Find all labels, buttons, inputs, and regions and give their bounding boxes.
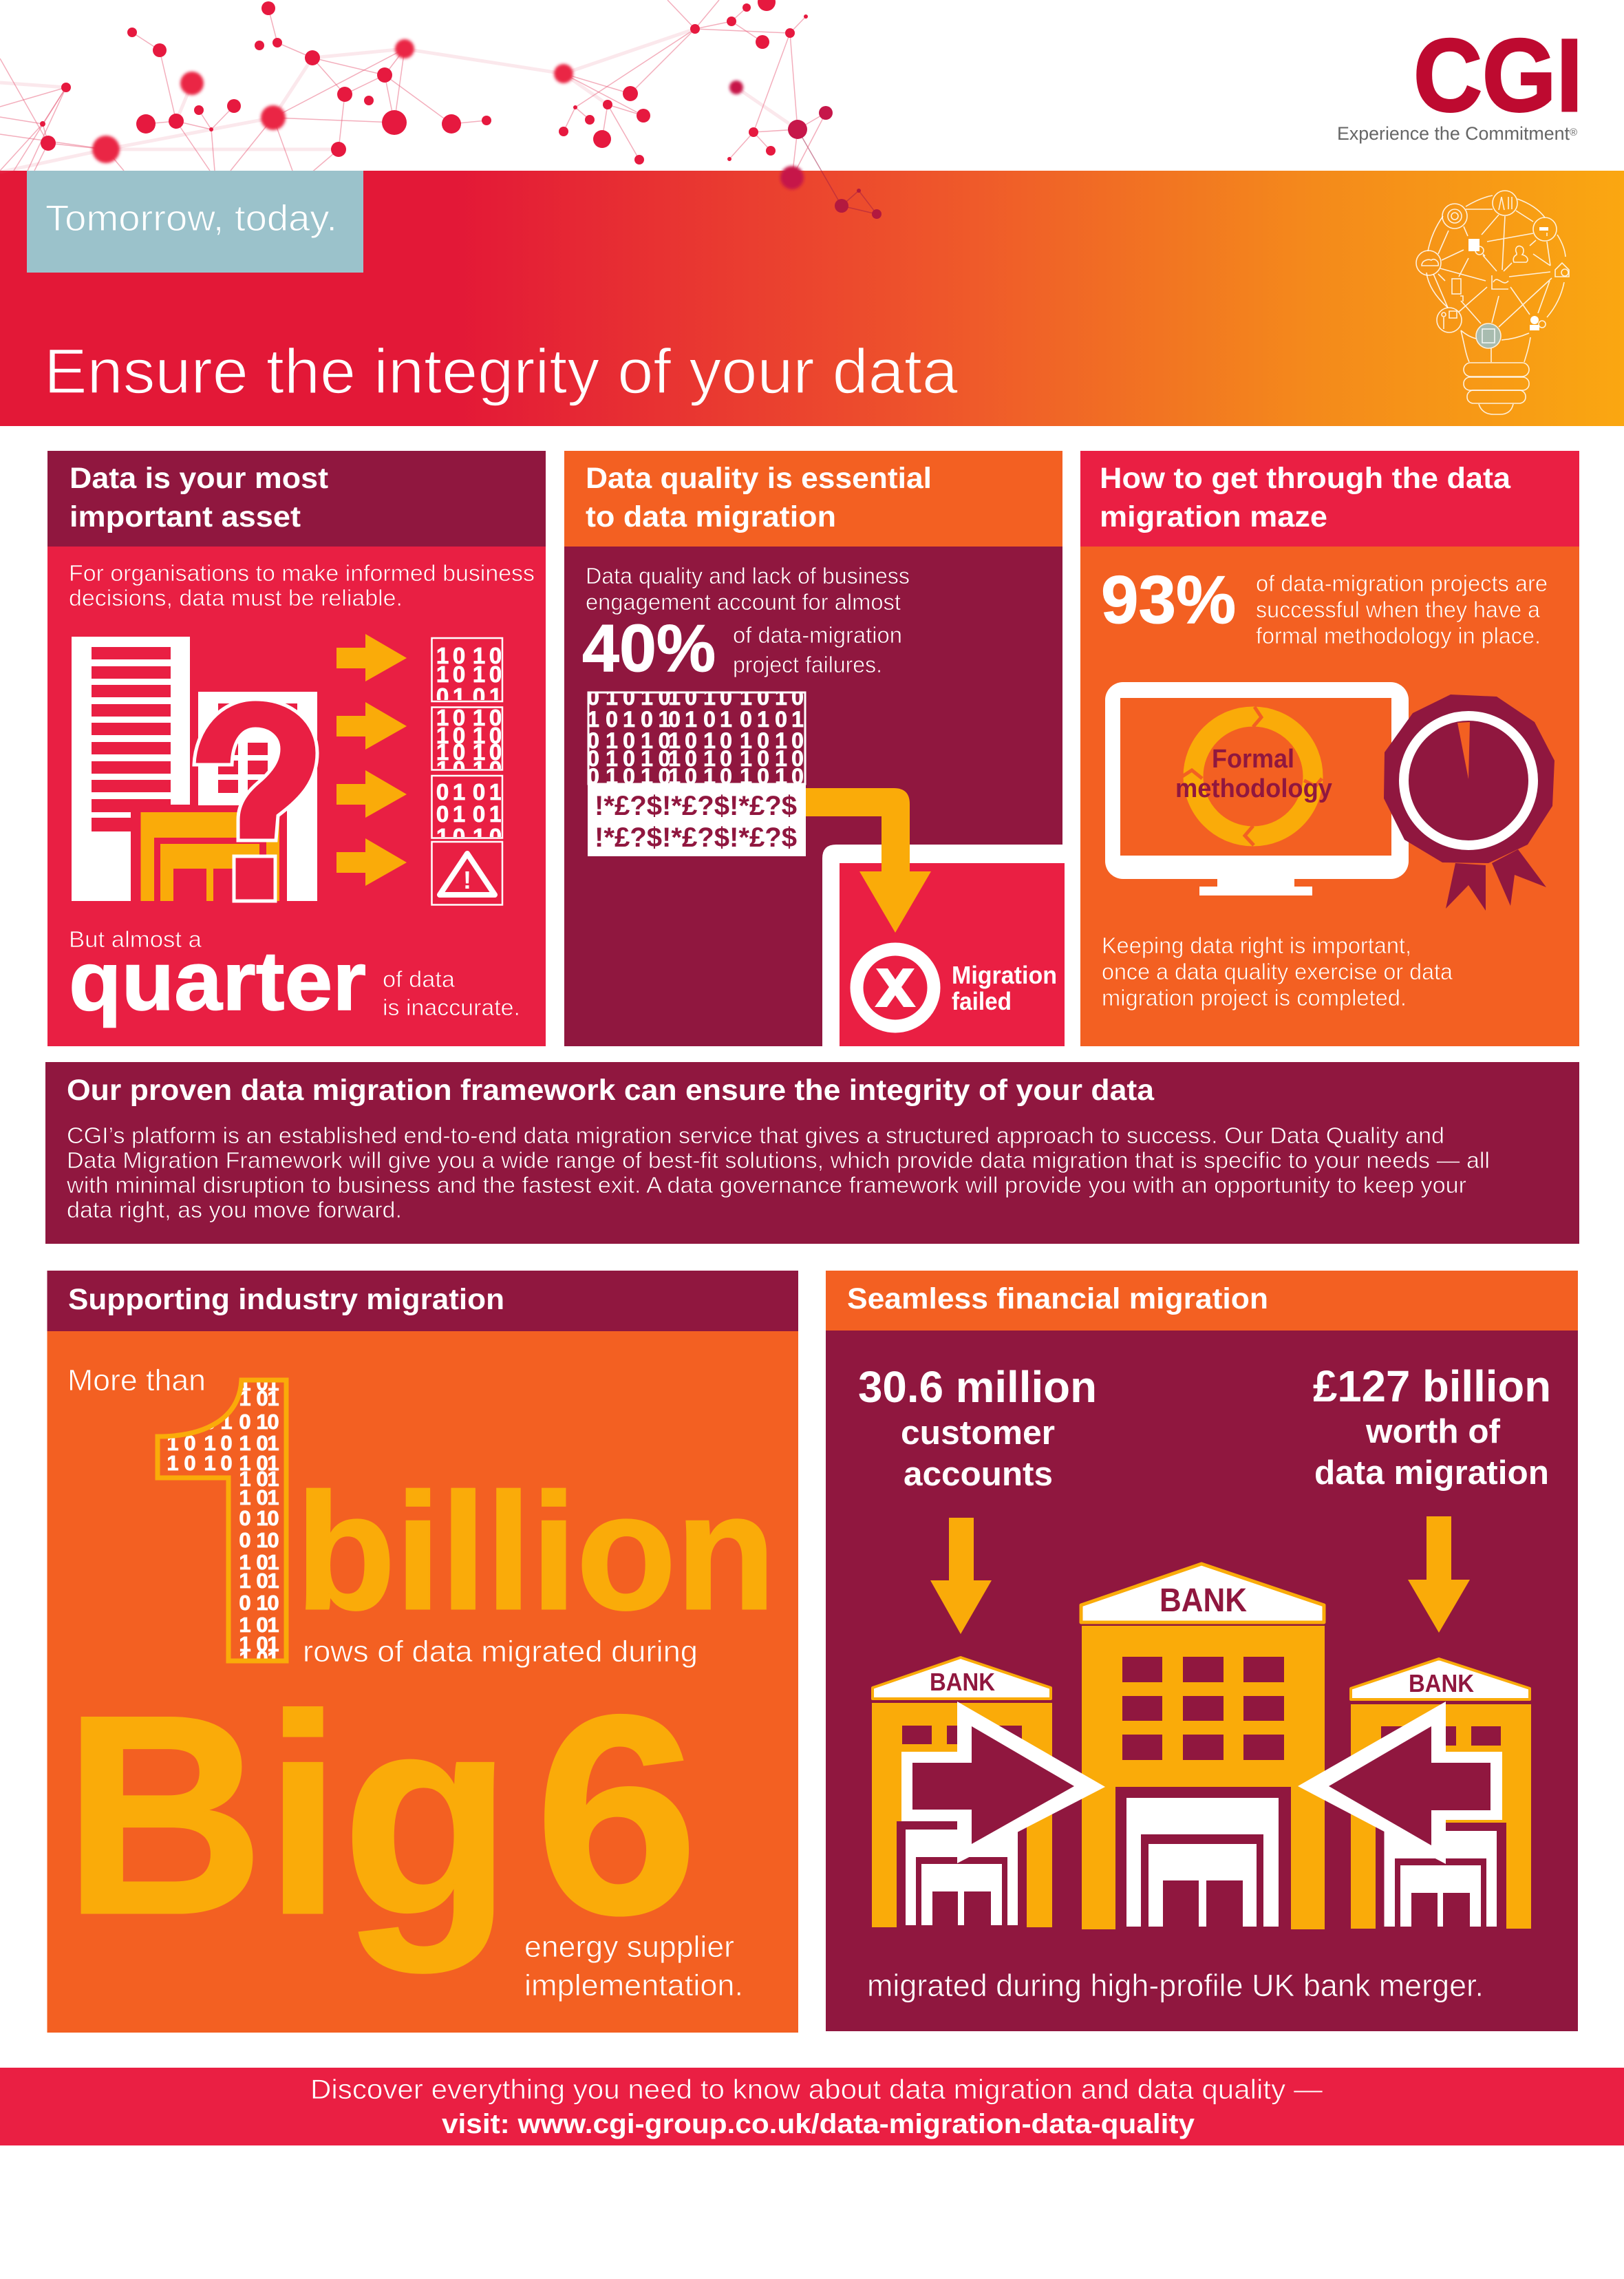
closing text <box>1102 933 1453 1010</box>
icon: data stacks and warning: ! <box>463 866 471 894</box>
stat: 40% <box>582 611 902 686</box>
arrows <box>336 634 407 886</box>
intro text <box>69 560 535 611</box>
panel heading: How to get through the data <box>1100 462 1511 495</box>
stat: 30.6 million customer accounts: 30.6 million <box>858 1362 1097 1412</box>
header banner <box>0 171 1624 426</box>
panel: proven framework: Our proven data migration framework can ensure the integrity of your data <box>67 1074 1155 1107</box>
numeral one of binary digits: 101 <box>239 1646 279 1671</box>
stat: quarter of data inaccurate: quarter <box>69 934 366 1028</box>
closing text: migration project is completed. <box>1102 985 1407 1010</box>
numeral one of binary digits: 101 <box>239 1550 279 1574</box>
stat: more than 1 billion rows: billion <box>296 1459 776 1644</box>
panel heading: migration maze <box>1100 500 1327 533</box>
stat: Big 6 energy supplier <box>63 1657 743 2002</box>
panel heading <box>564 451 1062 547</box>
corrupted data block: 0101010101010 <box>587 685 804 710</box>
stat: quarter of data inaccurate: is inaccurate. <box>383 995 520 1020</box>
icon: data stacks and warning: 0101 <box>436 801 502 827</box>
closing text: Keeping data right is important, <box>1102 933 1411 958</box>
panel: seamless financial migration <box>826 1271 1578 2031</box>
stat: 40%: project failures. <box>733 652 882 677</box>
stat: Big 6 energy supplier: energy supplier <box>524 1930 734 1964</box>
icon: lightbulb network <box>1416 191 1569 414</box>
icon: monitor with methodology cycle <box>1105 682 1409 895</box>
panel heading <box>826 1271 1578 1331</box>
stat: more than 1 billion rows: More than <box>67 1364 206 1397</box>
icon: data stacks and warning: 1010 <box>436 723 502 748</box>
arrow: billion down <box>1408 1516 1470 1633</box>
stat: more than 1 billion rows <box>67 1364 776 1671</box>
numeral one of binary digits: 1010101 <box>167 1451 279 1475</box>
panel: data quality is essential <box>564 451 1065 1046</box>
numeral one of binary digits: 010 <box>239 1506 279 1530</box>
tagline box <box>27 171 363 273</box>
migration failed box: Migration <box>952 961 1057 989</box>
arrow: data to failure <box>806 788 931 933</box>
panel: data migration maze <box>1080 451 1579 1046</box>
corrupted data block <box>587 685 806 856</box>
icon: central bank <box>1081 1564 1325 1929</box>
panel heading: to data migration <box>586 500 836 533</box>
stat: 127 billion data migration: £127 billion <box>1313 1361 1551 1411</box>
panel heading: important asset <box>70 500 301 533</box>
body text: data right, as you move forward. <box>67 1197 402 1222</box>
footer call to action <box>0 2068 1624 2145</box>
numeral one of binary digits: 101 <box>239 1569 279 1593</box>
icon: data stacks and warning: 1010 <box>436 739 502 765</box>
intro text: engagement account for almost <box>586 589 901 615</box>
numeral one of binary digits: 101 <box>239 1613 279 1637</box>
network graphic <box>0 0 882 219</box>
stat: quarter of data inaccurate <box>69 926 520 1028</box>
icon: data stacks and warning: 0101 <box>436 779 502 805</box>
icon: data stacks and warning: 1010 <box>436 661 502 687</box>
numeral one of binary digits: 101 <box>239 1386 279 1410</box>
icon: data stacks and warning: 1010 <box>436 756 502 782</box>
panel: data is your most important asset <box>47 451 546 1046</box>
arrow: left merger <box>901 1702 1105 1863</box>
corrupted data block: 0101010101010 <box>587 764 804 789</box>
stat: 127 billion data migration <box>1313 1361 1551 1492</box>
icon: data stacks and warning <box>432 638 502 904</box>
stat: 93% <box>1101 562 1548 648</box>
numeral one of binary digits: 01010 <box>204 1410 279 1434</box>
icon: data stacks and warning: 1010 <box>436 643 502 668</box>
panel heading <box>47 451 546 547</box>
closing text: once a data quality exercise or data <box>1102 959 1453 984</box>
panel heading: Seamless financial migration <box>847 1282 1268 1315</box>
icon: monitor with methodology cycle: Formal <box>1212 745 1294 774</box>
stat: more than 1 billion rows: rows of data migrated during <box>303 1635 698 1668</box>
numeral one of binary digits: 010 <box>239 1528 279 1552</box>
icon: left bank <box>872 1657 1052 1927</box>
corrupted data block: !*£?$!*£?$!*£?$ <box>595 791 797 821</box>
intro text: Data quality and lack of business <box>586 563 910 589</box>
icon: left bank: BANK <box>930 1668 995 1696</box>
body text: with minimal disruption to business and the fastest exit. A data governance framework will provide you with an opportunity to keep your <box>66 1172 1466 1198</box>
panel: proven framework <box>45 1062 1579 1244</box>
panel heading: Data quality is essential <box>586 462 932 495</box>
corrupted data block: 0101010101010 <box>587 746 804 771</box>
intro text: For organisations to make informed business <box>69 560 535 586</box>
body text: CGI’s platform is an established end-to-end data migration service that gives a structured approach to success. Our Data Quality and <box>67 1123 1444 1148</box>
corrupted data block: !*£?$!*£?$!*£?$ <box>595 823 797 853</box>
icon: rosette chart <box>1384 695 1554 911</box>
tagline box: Tomorrow, today. <box>45 198 337 239</box>
stat: 30.6 million customer accounts <box>858 1362 1097 1493</box>
numeral one of binary digits: 101 <box>239 1485 279 1509</box>
stat: 127 billion data migration: worth of <box>1365 1413 1501 1450</box>
arrow: right merger <box>1298 1702 1502 1864</box>
icon: data stacks and warning: 0101 <box>436 683 502 709</box>
panel heading <box>47 1271 798 1331</box>
panel: supporting industry migration <box>47 1271 798 2033</box>
body text: Data Migration Framework will give you a wide range of best-fit solutions, which provide data migration that is specific to your needs — all <box>67 1147 1490 1173</box>
migration failed box: failed <box>952 987 1012 1015</box>
title: Ensure the integrity of your data <box>44 337 959 407</box>
stat: 30.6 million customer accounts: accounts <box>904 1456 1053 1493</box>
stat: 30.6 million customer accounts: customer <box>901 1414 1055 1452</box>
intro text <box>586 563 910 615</box>
numeral one of binary digits: 101 <box>239 1371 279 1395</box>
arrow: accounts down <box>930 1518 992 1634</box>
stat: Big 6 energy supplier: 6 <box>535 1657 698 1973</box>
migration failed box <box>822 845 1065 1046</box>
icon: data stacks and warning: 1010 <box>436 824 502 849</box>
icon: monitor with methodology cycle: methodology <box>1175 774 1332 803</box>
intro text: decisions, data must be reliable. <box>69 585 403 611</box>
icon: data stacks and warning: 1010 <box>436 705 502 730</box>
caption: migrated during high-profile UK bank merger. <box>867 1968 1484 2003</box>
panel heading: Supporting industry migration <box>68 1283 504 1316</box>
stat: 93%: 93% <box>1101 562 1236 637</box>
CGI logo: CGI <box>1413 17 1583 133</box>
icon: right bank: BANK <box>1409 1669 1474 1697</box>
numeral one of binary digits: 101 <box>239 1632 279 1656</box>
icon: central bank: BANK <box>1160 1582 1247 1619</box>
panel heading: Data is your most <box>70 462 328 495</box>
CGI logo: ® <box>1570 127 1577 138</box>
stat: 93%: of data-migration projects are <box>1256 571 1548 596</box>
numeral one of binary digits <box>158 1371 286 1671</box>
CGI logo: Experience the Commitment <box>1337 123 1570 144</box>
numeral one of binary digits: 101 <box>239 1467 279 1491</box>
footer call to action: visit: www.cgi-group.co.uk/data-migration-data-quality <box>442 2109 1195 2139</box>
stat: quarter of data inaccurate: But almost a <box>69 926 202 952</box>
icon: buildings with question mark <box>72 637 317 901</box>
body text <box>66 1123 1490 1222</box>
corrupted data block: 0101010101010 <box>587 728 804 753</box>
stat: 127 billion data migration: data migration <box>1314 1454 1549 1492</box>
numeral one of binary digits: 1010101 <box>167 1431 279 1455</box>
corrupted data block: 1010101010101 <box>587 707 804 732</box>
stat: 40%: 40% <box>582 611 716 686</box>
stat: Big 6 energy supplier: implementation. <box>524 1969 743 2002</box>
stat: 93%: successful when they have a <box>1256 597 1541 622</box>
stat: 93%: formal methodology in place. <box>1256 623 1541 648</box>
stat: Big 6 energy supplier: Big <box>63 1657 512 1975</box>
stat: 40%: of data-migration <box>733 622 902 648</box>
stat: quarter of data inaccurate: of data <box>383 966 456 992</box>
CGI logo <box>1337 17 1583 144</box>
icon: right bank <box>1351 1659 1531 1929</box>
numeral one of binary digits: 010 <box>239 1591 279 1615</box>
icon: failure cross <box>857 949 934 1026</box>
panel heading <box>1080 451 1579 547</box>
footer call to action: Discover everything you need to know about data migration and data quality — <box>310 2075 1323 2105</box>
